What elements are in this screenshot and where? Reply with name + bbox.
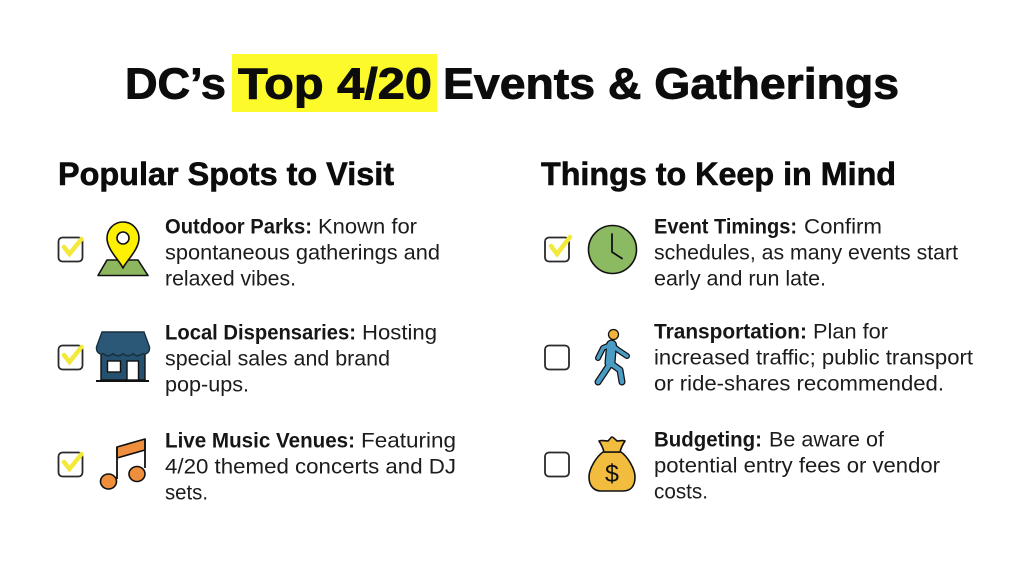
icon: map pin bbox=[98, 222, 148, 276]
panel: things to keep in mind bbox=[541, 156, 973, 504]
heading: popular spots: Popular Spots to Visit bbox=[58, 156, 394, 192]
item: outdoor parks bbox=[58, 216, 440, 290]
item: live music venues bbox=[58, 430, 456, 504]
text: local dispensaries: pop-ups. bbox=[165, 374, 249, 396]
icon: music notes bbox=[100, 439, 145, 489]
title: DC’s bbox=[125, 60, 226, 108]
text: budgeting: Budgeting: bbox=[654, 428, 762, 452]
text: event timings: early and run late. bbox=[654, 268, 826, 290]
checkbox empty bbox=[545, 452, 569, 476]
panel: popular spots to visit bbox=[58, 156, 456, 504]
item: budgeting bbox=[545, 428, 940, 504]
text: outdoor parks: relaxed vibes. bbox=[165, 268, 296, 290]
item: local dispensaries bbox=[58, 322, 437, 396]
text: event timings: schedules, as many events start bbox=[654, 242, 958, 264]
text: budgeting: Be aware of bbox=[769, 428, 884, 452]
text: local dispensaries: Local Dispensaries: bbox=[165, 322, 356, 344]
checkbox empty bbox=[545, 346, 569, 370]
text: local dispensaries bbox=[165, 322, 437, 396]
text: outdoor parks: spontaneous gatherings and bbox=[165, 242, 440, 264]
text: transportation: Transportation: bbox=[654, 320, 807, 344]
item: transportation bbox=[545, 320, 973, 396]
icon: money bag: $ bbox=[605, 460, 619, 488]
text: transportation bbox=[654, 320, 973, 396]
text: transportation: or ride-shares recommended. bbox=[654, 372, 944, 396]
text: event timings: Confirm bbox=[804, 216, 882, 238]
heading: things to keep in mind: Things to Keep in Mind bbox=[541, 156, 896, 192]
text: budgeting: costs. bbox=[654, 480, 708, 504]
icon: money bag bbox=[589, 437, 635, 491]
title: Events & Gatherings bbox=[443, 60, 899, 108]
icon: walking person bbox=[598, 330, 627, 382]
title bbox=[125, 54, 899, 112]
text: event timings bbox=[654, 216, 958, 290]
text: transportation: increased traffic; public transport bbox=[654, 346, 973, 370]
text: outdoor parks: Known for bbox=[318, 216, 417, 238]
text: live music venues bbox=[165, 430, 456, 504]
text: event timings: Event Timings: bbox=[654, 216, 797, 238]
checkbox checked bbox=[545, 237, 570, 262]
text: outdoor parks bbox=[165, 216, 440, 290]
text: live music venues: Live Music Venues: bbox=[165, 430, 355, 452]
text: transportation: Plan for bbox=[813, 320, 888, 344]
icon: clock bbox=[588, 226, 636, 274]
text: local dispensaries: Hosting bbox=[362, 322, 437, 344]
text: budgeting: potential entry fees or vendor bbox=[654, 454, 940, 478]
checkbox checked bbox=[58, 346, 82, 370]
text: outdoor parks: Outdoor Parks: bbox=[165, 216, 312, 238]
checkbox checked bbox=[58, 452, 82, 476]
item: event timings bbox=[545, 216, 958, 290]
title highlight bbox=[232, 54, 437, 112]
text: live music venues: 4/20 themed concerts and DJ bbox=[165, 456, 456, 478]
text: local dispensaries: special sales and brand bbox=[165, 348, 390, 370]
icon: storefront bbox=[96, 332, 150, 381]
checkbox checked bbox=[58, 238, 82, 262]
text: live music venues: sets. bbox=[165, 482, 208, 504]
text: live music venues: Featuring bbox=[361, 430, 456, 452]
text: budgeting bbox=[654, 428, 940, 504]
title: Top 4/20 bbox=[238, 60, 432, 108]
